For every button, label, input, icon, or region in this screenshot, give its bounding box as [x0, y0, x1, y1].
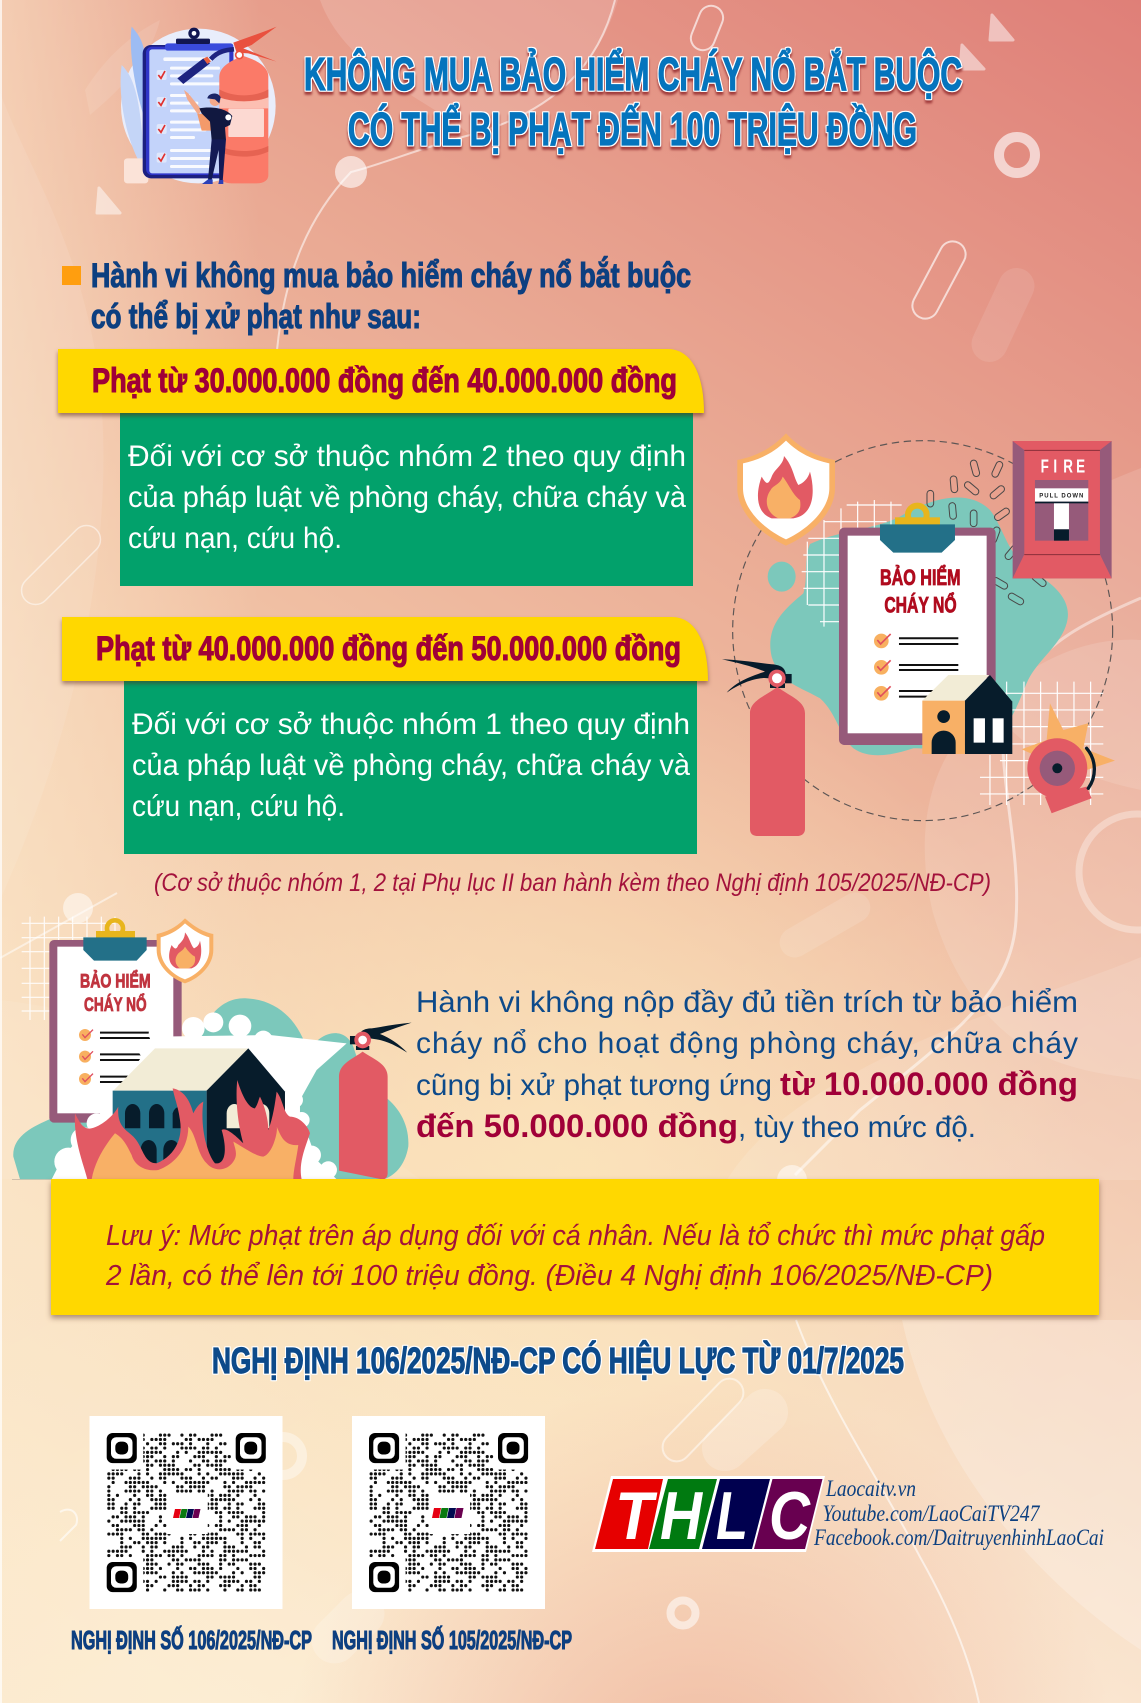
panel: group 1 penalty: cứu nạn, cứu hộ. [132, 790, 345, 823]
text block: insufficient contribution penalty: Hành vi không nộp đầy đủ tiền trích từ bảo hiểm [416, 986, 1078, 1019]
clipboard: CHÁY NỔ [884, 593, 957, 618]
text block: insufficient contribution penalty: từ 10.000.000 đồng [780, 1066, 1078, 1102]
logo: THLC [592, 1476, 825, 1554]
panel: group 1 penalty: của pháp luật về phòng cháy, chữa cháy và [132, 749, 690, 782]
website and social links: Youtube.com/LaoCaiTV247 [822, 1501, 1041, 1526]
QR caption 106: NGHỊ ĐỊNH SỐ 106/2025/NĐ-CP [71, 1625, 312, 1655]
text block: insufficient contribution penalty [416, 986, 1078, 1144]
shield with flame [737, 433, 835, 546]
extinguisher [722, 659, 805, 836]
panel: group 1 penalty: Phạt từ 40.000.000 đồng đến 50.000.000 đồng [96, 630, 681, 668]
icon: clipboard, extinguisher and firefighter [121, 27, 277, 184]
text block: insufficient contribution penalty: cũng bị xử phạt tương ứng [416, 1069, 772, 1102]
callout: note about organisations: Lưu ý: Mức phạt trên áp dụng đối với cá nhân. Nếu là tổ chức thì mức phạt gấp [106, 1220, 1045, 1252]
text block: insufficient contribution penalty: , tùy theo mức độ. [738, 1111, 976, 1144]
QR caption 105: NGHỊ ĐỊNH SỐ 105/2025/NĐ-CP [332, 1625, 572, 1655]
clipboard: BẢO HIỂM [80, 969, 151, 992]
text block: insufficient contribution penalty: đến 50.000.000 đồng [416, 1108, 738, 1144]
panel: group 2 penalty: Phạt từ 30.000.000 đồng đến 40.000.000 đồng [92, 362, 677, 400]
QR code: decree 106 [90, 1416, 282, 1609]
panel: group 2 penalty: Đối với cơ sở thuộc nhóm 2 theo quy định [128, 440, 686, 473]
callout: note about organisations [51, 1179, 1099, 1315]
burning house [75, 1048, 310, 1179]
title [304, 48, 962, 155]
fire alarm: PULL DOWN [1039, 493, 1083, 499]
house [922, 675, 1012, 754]
extinguisher [339, 1023, 412, 1179]
panel: group 1 penalty [62, 617, 708, 854]
fire alarm [1013, 441, 1112, 578]
website and social links: Laocaitv.vn [825, 1476, 916, 1501]
logo: THLC: H [660, 1478, 704, 1554]
clipboard: BẢO HIỂM [880, 565, 961, 590]
QR code: decree 105 [352, 1416, 545, 1609]
illustration: insurance clipboard with alarm and extinguisher [722, 433, 1115, 836]
website and social links [813, 1476, 1104, 1550]
heading: violations list: có thể bị xử phạt như sau: [91, 298, 421, 336]
alarm bell [1022, 703, 1115, 813]
foam cloud and spray [52, 1012, 347, 1179]
heading: violations list: Hành vi không mua bảo hiểm cháy nổ bắt buộc [91, 257, 691, 295]
logo: THLC: L [716, 1478, 748, 1554]
illustration: burning house and extinguisher [12, 917, 433, 1179]
clipboard: CHÁY NỔ [84, 992, 147, 1016]
logo: THLC: T [615, 1478, 658, 1554]
panel: group 2 penalty [58, 349, 704, 586]
callout: note about organisations: 2 lần, có thể lên tới 100 triệu đồng. (Điều 4 Nghị định 106/2025/NĐ-CP) [105, 1260, 993, 1292]
panel: group 1 penalty: Đối với cơ sở thuộc nhóm 1 theo quy định [132, 708, 690, 741]
heading: violations list [62, 257, 691, 336]
footnote: (Cơ sở thuộc nhóm 1, 2 tại Phụ lục II ban hành kèm theo Nghị định 105/2025/NĐ-CP) [154, 869, 991, 897]
clipboard [49, 920, 182, 1123]
logo: THLC: C [769, 1478, 811, 1554]
shield with flame [157, 918, 213, 983]
panel: group 2 penalty: của pháp luật về phòng cháy, chữa cháy và [128, 481, 686, 514]
clipboard [839, 506, 996, 745]
fire alarm: FIRE [1041, 457, 1085, 477]
text block: insufficient contribution penalty: cháy nổ cho hoạt động phòng cháy, chữa cháy [416, 1027, 1078, 1060]
panel: group 2 penalty: cứu nạn, cứu hộ. [128, 522, 342, 555]
heading: effective date: NGHỊ ĐỊNH 106/2025/NĐ-CP CÓ HIỆU LỰC TỪ 01/7/2025 [212, 1339, 904, 1381]
